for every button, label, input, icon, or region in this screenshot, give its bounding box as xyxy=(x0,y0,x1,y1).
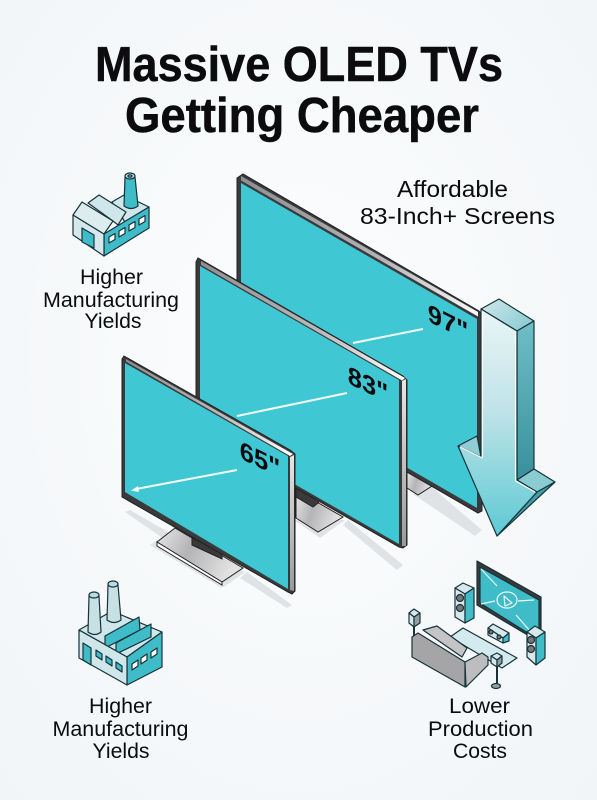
title xyxy=(95,38,503,143)
left speaker xyxy=(455,583,474,623)
label: higher manufacturing yields (bottom): Manufacturing xyxy=(52,717,188,741)
label: higher manufacturing yields (bottom): Higher xyxy=(89,694,152,718)
arrow: downward price drop xyxy=(458,299,555,536)
floor shadows xyxy=(125,484,482,608)
tv 83 body xyxy=(196,258,407,548)
centre speaker xyxy=(488,624,509,643)
tv 65 size label: 65" xyxy=(240,435,280,484)
icon: home theatre xyxy=(409,561,545,688)
tv 83 size label: 83" xyxy=(348,360,388,409)
icon: factory with two chimneys xyxy=(79,581,162,685)
tv 97 bezel highlight xyxy=(241,176,478,316)
tv: 83 inch xyxy=(196,258,407,548)
tv 65 stand xyxy=(157,528,243,585)
tv 97 stand xyxy=(407,472,432,495)
tv 97 diagonal line xyxy=(353,329,423,343)
rear right speaker xyxy=(491,653,502,688)
rug xyxy=(450,628,517,668)
wall tv xyxy=(477,561,541,643)
title: Massive OLED TVs xyxy=(95,38,503,92)
tv 97 size label: 97" xyxy=(428,298,468,347)
tv 97 screen xyxy=(241,183,477,508)
label: higher manufacturing yields (top): Manufacturing xyxy=(43,288,179,312)
label: higher manufacturing yields (top): Yields xyxy=(84,309,142,333)
sofa xyxy=(412,626,488,687)
tv 83 screen xyxy=(200,266,399,544)
label: higher manufacturing yields (top) xyxy=(43,265,179,333)
tv 83 side bezel xyxy=(402,379,406,546)
label: lower production costs: Lower xyxy=(449,694,510,718)
rear left speaker xyxy=(409,609,420,650)
tv 83 diagonal line xyxy=(237,393,347,416)
label: lower production costs xyxy=(428,694,533,763)
label: higher manufacturing yields (bottom): Yields xyxy=(92,739,150,763)
label: affordable screens xyxy=(360,176,555,229)
icon: factory with one chimney xyxy=(73,173,149,256)
tv: 97 inch xyxy=(237,174,482,513)
right speaker xyxy=(527,626,545,665)
tv 97 body xyxy=(237,174,482,513)
tv 65 screen xyxy=(125,363,288,589)
label: higher manufacturing yields (top): Higher xyxy=(80,265,143,289)
label: higher manufacturing yields (bottom) xyxy=(52,694,188,763)
label: affordable screens: Affordable xyxy=(397,176,508,202)
tv 65 diagonal arrow xyxy=(131,470,237,492)
label: lower production costs: Production xyxy=(428,717,533,741)
tv 83 top bezel xyxy=(201,261,405,380)
title: Getting Cheaper xyxy=(125,89,479,143)
tv: 65 inch xyxy=(122,356,295,594)
tv 65 body xyxy=(122,356,295,594)
label: lower production costs: Costs xyxy=(453,739,507,763)
label: affordable screens: 83-Inch+ Screens xyxy=(360,203,555,229)
tv 83 stand xyxy=(296,485,343,532)
tv 65 top bezel xyxy=(126,359,293,456)
tv 65 side bezel xyxy=(290,455,294,591)
